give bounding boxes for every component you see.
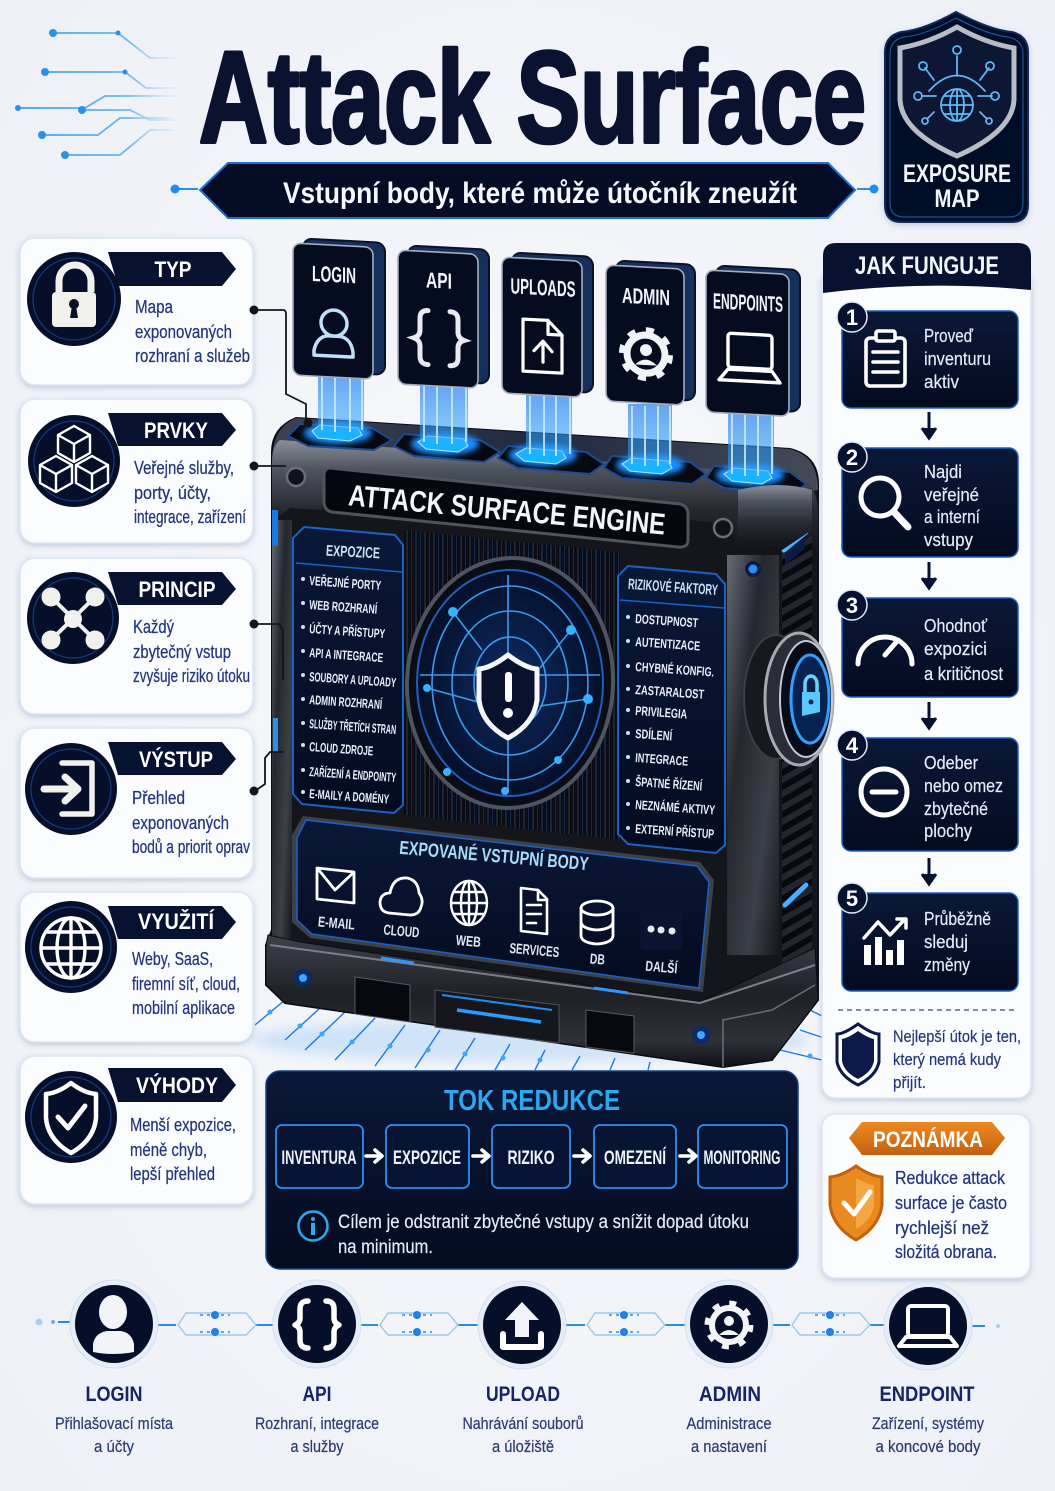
list: expozice: E-MAILY A DOMÉNY: [309, 786, 390, 807]
module: ADMIN: [606, 260, 695, 406]
icon: gear: [622, 329, 670, 379]
flow step: inventura: INVENTURA: [282, 1148, 357, 1169]
tag: VÝHODY: VÝHODY: [136, 1073, 218, 1098]
flow step: monitoring: MONITORING: [704, 1148, 780, 1169]
label: upload: UPLOAD: [486, 1383, 560, 1406]
step 5 text: Průběžně: [924, 908, 991, 929]
icon: lock: [27, 252, 121, 346]
machine: attack surface engine: [266, 418, 818, 1067]
list: expozice: VEŘEJNÉ PORTY: [309, 573, 382, 593]
tag: note: POZNÁMKA: [873, 1127, 983, 1152]
badge: exposure map: MAP: [934, 185, 980, 213]
list: expozice: SLUŽBY TŘETÍCH STRAN: [309, 716, 397, 737]
note text: složitá obrana.: [895, 1242, 997, 1262]
note text: surface je často: [895, 1193, 1007, 1213]
step 3 text: a kritičnost: [924, 663, 1003, 684]
step 5: 5: [846, 886, 858, 911]
label: endpoint: [872, 1383, 984, 1456]
label: db: DB: [589, 951, 606, 969]
label: admin: ADMIN: [699, 1383, 761, 1406]
icon: shield check: [25, 1071, 117, 1163]
bottom item: upload: [462, 1281, 584, 1456]
flow step: riziko: [492, 1125, 570, 1188]
icon: laptop: [719, 333, 780, 383]
list: rizikove faktory: [626, 611, 716, 842]
subtitle banner: [170, 163, 878, 218]
badge shield: [900, 27, 1014, 156]
module: ENDPOINTS: ENDPOINTS: [713, 288, 783, 317]
text: VÝSTUP: [132, 788, 250, 857]
panel: expozice: [293, 527, 403, 813]
bottom connectors: [36, 1311, 1000, 1336]
text: TYP: exponovaných: [135, 322, 232, 342]
module: UPLOADS: UPLOADS: [511, 273, 576, 302]
icon: trend chart: [864, 919, 906, 965]
panel: note: [822, 1114, 1030, 1278]
panel: VÝSTUP: [20, 728, 253, 878]
step 5: [837, 883, 1018, 991]
list: rizikove faktory: DOSTUPNOST: [635, 611, 699, 630]
tag: TYP: [108, 252, 236, 286]
text: PRVKY: Veřejné služby,: [134, 458, 234, 478]
arrow: 2 to 3: [922, 562, 936, 588]
list: expozice: [301, 573, 397, 807]
icon: network: [27, 572, 119, 664]
plate text: ATTACK SURFACE ENGINE: [347, 479, 667, 542]
quote: Nejlepší útok je ten,: [893, 1027, 1021, 1046]
text: VÝHODY: méně chyb,: [130, 1140, 207, 1160]
label: admin: Administrace: [686, 1414, 772, 1433]
centre vent: [404, 530, 620, 840]
list: rizikove faktory: EXTERNÍ PŘÍSTUP: [635, 821, 715, 842]
list: expozice: SOUBORY A UPLOADY: [309, 669, 397, 690]
tag: TYP: TYP: [154, 257, 192, 282]
badge label: EXPOSURE: [903, 160, 1011, 188]
icon: exit arrow: [25, 743, 117, 835]
icon: gauge: [858, 637, 912, 664]
flow step: expozice: EXPOZICE: [393, 1148, 461, 1169]
quote: který nemá kudy: [893, 1050, 1001, 1069]
list: rizikove faktory: INTEGRACE: [635, 750, 689, 769]
label: web: WEB: [455, 933, 481, 951]
panel: VÝHODY: [20, 1056, 253, 1204]
panel: rizikove faktory: [618, 566, 725, 853]
icon: shield quote: [837, 1024, 879, 1085]
text: VÝHODY: Menší expozice,: [130, 1115, 236, 1135]
label: endpoint: ENDPOINT: [880, 1383, 975, 1406]
step 3 text: [924, 615, 1003, 684]
list: rizikove faktory: SDÍLENÍ: [635, 726, 673, 744]
step 2 text: Najdi: [924, 461, 962, 482]
side lock dial: [744, 633, 833, 765]
label: endpoint: a koncové body: [876, 1437, 981, 1456]
step 3 text: Ohodnoť: [924, 615, 988, 636]
flow step: monitoring: [698, 1125, 787, 1188]
step 4: [837, 730, 1018, 851]
label: upload: a úložiště: [492, 1437, 554, 1456]
icon: info: [298, 1212, 328, 1240]
heading: reduction flow: TOK REDUKCE: [444, 1085, 620, 1117]
bolts: [287, 468, 732, 537]
icon: braces: [295, 1301, 339, 1348]
label: e-mail: E-MAIL: [317, 914, 356, 934]
label: login: [55, 1383, 173, 1456]
label: admin: a nastavení: [691, 1437, 767, 1456]
step 1: [837, 302, 1018, 408]
list: rizikove faktory: ZASTARALOST: [635, 682, 705, 702]
floor glow grid: [250, 1000, 845, 1070]
title plate: [324, 468, 688, 547]
step 1 text: Proveď: [924, 325, 974, 346]
text: VÝSTUP: bodů a priorit oprav: [132, 837, 250, 857]
list: expozice: CLOUD ZDROJE: [309, 739, 374, 758]
quote: přijít.: [893, 1073, 926, 1092]
panel: reduction flow: [266, 1071, 798, 1269]
tag: VÝSTUP: [108, 742, 236, 775]
flow step: inventura: [276, 1125, 363, 1188]
tag: VÝSTUP: VÝSTUP: [139, 747, 213, 772]
list: expozice: ÚČTY A PŘÍSTUPY: [309, 621, 386, 641]
text: PRVKY: porty, účty,: [134, 483, 211, 503]
list: rizikove faktory: NEZNÁMÉ AKTIVY: [635, 797, 716, 818]
tag: VYUŽITÍ: [108, 906, 236, 939]
heading: how it works: JAK FUNGUJE: [855, 252, 999, 280]
icon: web globe: [451, 881, 487, 925]
icon: lock glow: [802, 676, 820, 716]
module: UPLOADS: [502, 252, 593, 398]
label: cloud: CLOUD: [383, 922, 420, 942]
tag: PRVKY: PRVKY: [144, 418, 208, 443]
step 2 text: [924, 461, 981, 550]
icon: more dots: [640, 912, 682, 950]
icon: braces: [414, 310, 464, 366]
icon: upload: [503, 1302, 541, 1347]
module: ADMIN: ADMIN: [622, 283, 670, 310]
quote: [893, 1027, 1021, 1092]
machine top surface: [272, 418, 818, 492]
list: rizikove faktory: PRIVILEGIA: [635, 703, 688, 722]
bottom item: login: [55, 1280, 173, 1456]
step 4 text: [924, 752, 1003, 841]
note text: rychlejší než: [895, 1218, 989, 1238]
arrow: 3 to 4: [922, 702, 936, 728]
tag: PRINCIP: [108, 572, 236, 605]
text: VÝHODY: [130, 1115, 236, 1184]
text: PRINCIP: Každý: [133, 617, 174, 637]
step 4 text: zbytečné: [924, 798, 988, 819]
icon: globe: [25, 901, 117, 993]
text: TYP: [135, 297, 250, 366]
flow step: omezeni: [594, 1125, 676, 1188]
label: api: Rozhraní, integrace: [255, 1414, 379, 1433]
flow note: na minimum.: [338, 1237, 433, 1258]
label: login: a účty: [94, 1437, 134, 1456]
icon: laptop: [899, 1306, 957, 1346]
icon: services document: [521, 888, 547, 934]
icon: minus circle: [861, 769, 907, 815]
tag: VÝHODY: [108, 1068, 236, 1102]
icon: clipboard: [866, 331, 905, 386]
label: services: SERVICES: [509, 941, 560, 961]
flow step: expozice: [386, 1125, 469, 1188]
circuit decoration top left: [15, 29, 180, 159]
tag: note: [849, 1122, 1005, 1155]
icon: file upload: [523, 319, 562, 373]
note text: Redukce attack: [895, 1168, 1006, 1188]
label: admin: [686, 1383, 772, 1456]
text: VYUŽITÍ: mobilní aplikace: [132, 998, 235, 1018]
flow note: Cílem je odstranit zbytečné vstupy a snížit dopad útoku: [338, 1212, 749, 1233]
tag: PRINCIP: PRINCIP: [138, 577, 216, 602]
bottom item: endpoint: [872, 1282, 984, 1456]
step 1 text: aktiv: [924, 371, 960, 392]
text: PRINCIP: [133, 617, 250, 686]
note text: [895, 1168, 1007, 1262]
icon: database: [581, 901, 613, 944]
text: VÝHODY: lepší přehled: [130, 1164, 215, 1184]
panel: exposed entry points: [292, 816, 714, 992]
label: login: LOGIN: [86, 1383, 142, 1406]
heading: exposed entry points: EXPOVANÉ VSTUPNÍ BODY: [398, 837, 590, 875]
step 3: [837, 590, 1018, 697]
flow note: [338, 1212, 749, 1258]
label: login: Přihlašovací místa: [55, 1414, 173, 1433]
flow step: omezeni: OMEZENÍ: [604, 1147, 667, 1169]
step 5 text: sleduj: [924, 931, 968, 952]
flow step: riziko: RIZIKO: [508, 1148, 554, 1169]
bottom item: admin: [685, 1280, 773, 1456]
step 3: 3: [846, 593, 858, 618]
step 2: [837, 442, 1018, 557]
panel: TYP: [20, 238, 253, 385]
icon: cloud: [380, 878, 422, 915]
flow arrows: [366, 1150, 696, 1162]
heading: how it works: [823, 243, 1031, 293]
module: LOGIN: [293, 238, 385, 380]
list: rizikove faktory: AUTENTIZACE: [635, 634, 701, 654]
sockets row: [288, 422, 806, 494]
label: more: DALŠÍ: [645, 957, 679, 977]
step 4 text: Odeber: [924, 752, 978, 773]
subtitle text: Vstupní body, které může útočník zneužít: [283, 177, 797, 210]
icon: cubes: [28, 415, 120, 507]
text: VÝSTUP: Přehled: [132, 788, 185, 808]
tag: PRVKY: [108, 413, 236, 446]
icon: user: [93, 1295, 134, 1354]
radar dial: [401, 553, 619, 813]
step 2 text: vstupy: [924, 529, 974, 550]
arrow: 1 to 2: [922, 412, 936, 438]
panel: PRVKY: [20, 399, 253, 543]
text: TYP: Mapa: [135, 297, 174, 317]
machine body: [266, 418, 818, 1067]
step 5 text: [924, 908, 991, 975]
step 5 text: změny: [924, 954, 971, 975]
tag: VYUŽITÍ: VYUŽITÍ: [138, 909, 215, 934]
step 2: 2: [846, 445, 858, 470]
icon: magnifier: [861, 478, 908, 527]
list: expozice: ZAŘÍZENÍ A ENDPOINTY: [309, 764, 397, 785]
list: rizikove faktory: CHYBNÉ KONFIG.: [635, 659, 715, 680]
text: VYUŽITÍ: Weby, SaaS,: [132, 949, 213, 969]
module: API: API: [426, 267, 452, 294]
step 1 text: [924, 325, 991, 392]
heading: expozice: EXPOZICE: [326, 543, 380, 562]
icon: orange shield: [830, 1166, 882, 1240]
module: API: [398, 245, 489, 389]
icon: e-mail: [317, 868, 354, 903]
step 3 text: expozici: [924, 638, 987, 659]
panel: PRINCIP: [20, 558, 253, 714]
step 4: 4: [846, 733, 859, 758]
machine base: [266, 935, 818, 1067]
module: LOGIN: LOGIN: [312, 261, 356, 288]
list: expozice: API A INTEGRACE: [309, 645, 384, 665]
beams from modules into machine: [318, 374, 774, 476]
step 1: 1: [846, 305, 858, 330]
text: TYP: rozhraní a služeb: [135, 346, 250, 366]
label: endpoint: Zařízení, systémy: [872, 1414, 984, 1433]
panel: VYUŽITÍ: [20, 892, 253, 1042]
arrow: 4 to 5: [922, 858, 936, 884]
label: upload: [462, 1383, 584, 1456]
machine upper metal band: [272, 440, 818, 556]
list: rizikove faktory: ŠPATNÉ ŘÍZENÍ: [635, 774, 703, 794]
step 2 text: veřejné: [924, 484, 979, 505]
text: PRINCIP: zvyšuje riziko útoku: [133, 666, 250, 686]
label: api: API: [302, 1383, 332, 1406]
badge globe network: [914, 46, 999, 124]
list: expozice: WEB ROZHRANÍ: [309, 597, 378, 617]
icon: gear: [707, 1303, 751, 1347]
panel: how it works: [822, 243, 1031, 1098]
left side strip: [272, 510, 292, 940]
badge: exposure map: [885, 12, 1028, 222]
icon: shield with exclamation: [479, 655, 537, 738]
right side column: [727, 485, 812, 990]
text: PRVKY: [134, 458, 246, 527]
connector lines from cards to machine: [250, 306, 312, 796]
module: ENDPOINTS: [706, 265, 800, 417]
text: PRVKY: integrace, zařízení: [134, 507, 246, 527]
heading: rizikove faktory: RIZIKOVÉ FAKTORY: [627, 576, 718, 599]
list: expozice: ADMIN ROZHRANÍ: [309, 692, 383, 712]
label: upload: Nahrávání souborů: [462, 1414, 584, 1433]
text: VÝSTUP: exponovaných: [132, 813, 229, 833]
text: PRINCIP: zbytečný vstup: [133, 642, 231, 662]
step 4 text: nebo omez: [924, 775, 1003, 796]
text: VYUŽITÍ: firemní síť, cloud,: [132, 974, 240, 994]
step 2 text: a interní: [924, 506, 981, 527]
step 1 text: inventuru: [924, 348, 991, 369]
text: VYUŽITÍ: [132, 949, 240, 1018]
step 4 text: plochy: [924, 820, 973, 841]
label: api: a služby: [290, 1437, 344, 1456]
icon: user: [314, 309, 353, 357]
label: api: [255, 1383, 379, 1456]
bottom item: api: [255, 1280, 379, 1456]
